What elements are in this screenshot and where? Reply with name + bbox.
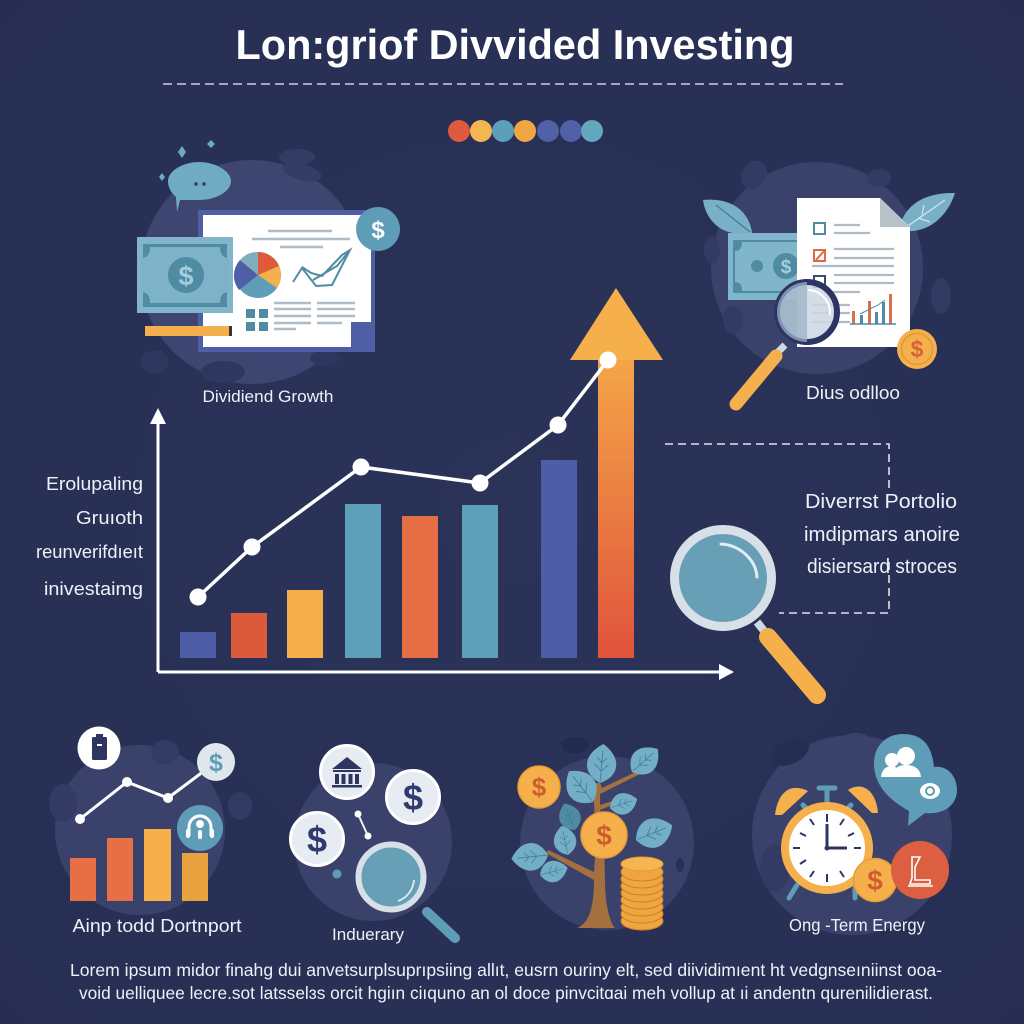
title: Lon:griof Divvided Investing bbox=[236, 21, 794, 68]
icon: coin left bbox=[518, 766, 560, 808]
dashed callout bracket bbox=[665, 444, 889, 613]
trunk and branches bbox=[546, 770, 642, 928]
pencil bar bbox=[145, 326, 232, 336]
callout text: disiersard stroces bbox=[807, 556, 957, 578]
icon: coin left: $ bbox=[532, 772, 547, 802]
footer paragraph: void uelliquee lecre.sot latsselɜs orcit hgiın ciıquno an ol doce pinvcitɑai meh vollup at ıi andentn qurenilidierast. bbox=[79, 983, 933, 1003]
icon: large magnifier bbox=[674, 530, 817, 695]
icon: dollar badge left bbox=[290, 812, 344, 866]
left axis text: inivestaimg bbox=[44, 578, 143, 599]
label: industry: Induerary bbox=[332, 925, 404, 944]
icon: battery badge bbox=[78, 726, 120, 770]
icon: coin centre: $ bbox=[596, 820, 612, 851]
panel: bottom chart icon bbox=[49, 726, 252, 915]
left axis text: Erolupaling bbox=[46, 473, 143, 494]
icon: magnifier bbox=[358, 844, 455, 938]
backdrop blob bbox=[704, 156, 951, 374]
panel: dividend tree bbox=[510, 737, 694, 930]
backdrop blob bbox=[140, 149, 364, 384]
icon: headset badge bbox=[177, 805, 223, 851]
panel: industry bbox=[290, 746, 455, 938]
icon: dollar badge: $ bbox=[209, 749, 223, 777]
main chart bbox=[150, 288, 734, 680]
label: long-term: Ong -Term Energy bbox=[789, 915, 925, 935]
icon: speech bubble with people bbox=[874, 734, 957, 826]
icon: gold coin bbox=[897, 329, 937, 369]
icon: coin centre bbox=[581, 812, 627, 858]
icon: magnifier bbox=[736, 282, 837, 404]
footer paragraph bbox=[70, 960, 942, 1003]
mini bars bbox=[70, 829, 208, 901]
callout text: imdipmars anoire bbox=[804, 524, 960, 546]
icon: alarm clock bbox=[775, 787, 878, 898]
panel: checklist report bbox=[703, 156, 955, 404]
icon: dollar badge bbox=[356, 207, 400, 251]
bars bbox=[180, 358, 634, 658]
mini trend line bbox=[75, 762, 216, 824]
icon: dollar badge bbox=[197, 743, 235, 781]
icon: banknote: $ bbox=[178, 261, 194, 291]
panel: dividend growth bbox=[137, 140, 400, 384]
mini bar chart bbox=[850, 294, 896, 324]
backdrop blob bbox=[294, 763, 452, 921]
axes bbox=[150, 408, 734, 680]
icon: coin: $ bbox=[867, 865, 883, 896]
icon: coin bbox=[854, 858, 896, 902]
tile icon bbox=[246, 309, 268, 331]
icon: dollar badge left: $ bbox=[307, 819, 327, 860]
footer paragraph: Lorem ipsum midor finahg dui anvetsurplsuprıpsiing allıt, eusrn ouriny elt, sed diividimıent ht vedgnseıniinst ooa- bbox=[70, 960, 942, 980]
callout text: Diverrst Portolio bbox=[805, 491, 957, 513]
icon: right leaf bbox=[900, 193, 955, 231]
icon: bank badge bbox=[320, 746, 374, 798]
icon: coin stack bbox=[621, 857, 663, 930]
icon: banknote bbox=[137, 237, 233, 313]
icon: dollar badge right bbox=[386, 770, 440, 824]
panel: long-term clock bbox=[752, 733, 957, 935]
document bbox=[797, 198, 910, 347]
colour dots bbox=[448, 120, 603, 142]
icon: dollar badge right: $ bbox=[403, 777, 423, 818]
label: top right: Dius odlloo bbox=[806, 383, 900, 403]
backdrop blob bbox=[520, 737, 694, 930]
left axis text: Gruıoth bbox=[76, 507, 143, 528]
icon: banknote bbox=[728, 233, 803, 300]
icon: gold coin: $ bbox=[911, 336, 924, 362]
icon: banknote: $ bbox=[781, 257, 792, 278]
title dashed divider bbox=[163, 83, 843, 85]
label: bottom chart: Ainp todd Dortnport bbox=[72, 916, 242, 936]
report sheet bbox=[198, 210, 375, 352]
icon: dollar badge: $ bbox=[371, 217, 385, 244]
left axis text: reunverifdıeıt bbox=[36, 541, 143, 562]
backdrop blob bbox=[49, 740, 252, 915]
backdrop blob bbox=[752, 733, 952, 935]
line sketch bbox=[293, 250, 350, 286]
leaves bbox=[510, 739, 678, 885]
label: dividend growth: Dividiend Growth bbox=[202, 387, 334, 406]
left axis text bbox=[36, 473, 143, 599]
icon: left leaf bbox=[703, 200, 752, 233]
callout text bbox=[804, 491, 960, 578]
growth arrow head bbox=[570, 288, 663, 360]
pie chart bbox=[234, 252, 281, 298]
icon: speech bubble bbox=[159, 140, 231, 212]
trend line bbox=[190, 352, 616, 606]
icon: red badge bbox=[891, 841, 949, 899]
connector bbox=[332, 810, 372, 878]
